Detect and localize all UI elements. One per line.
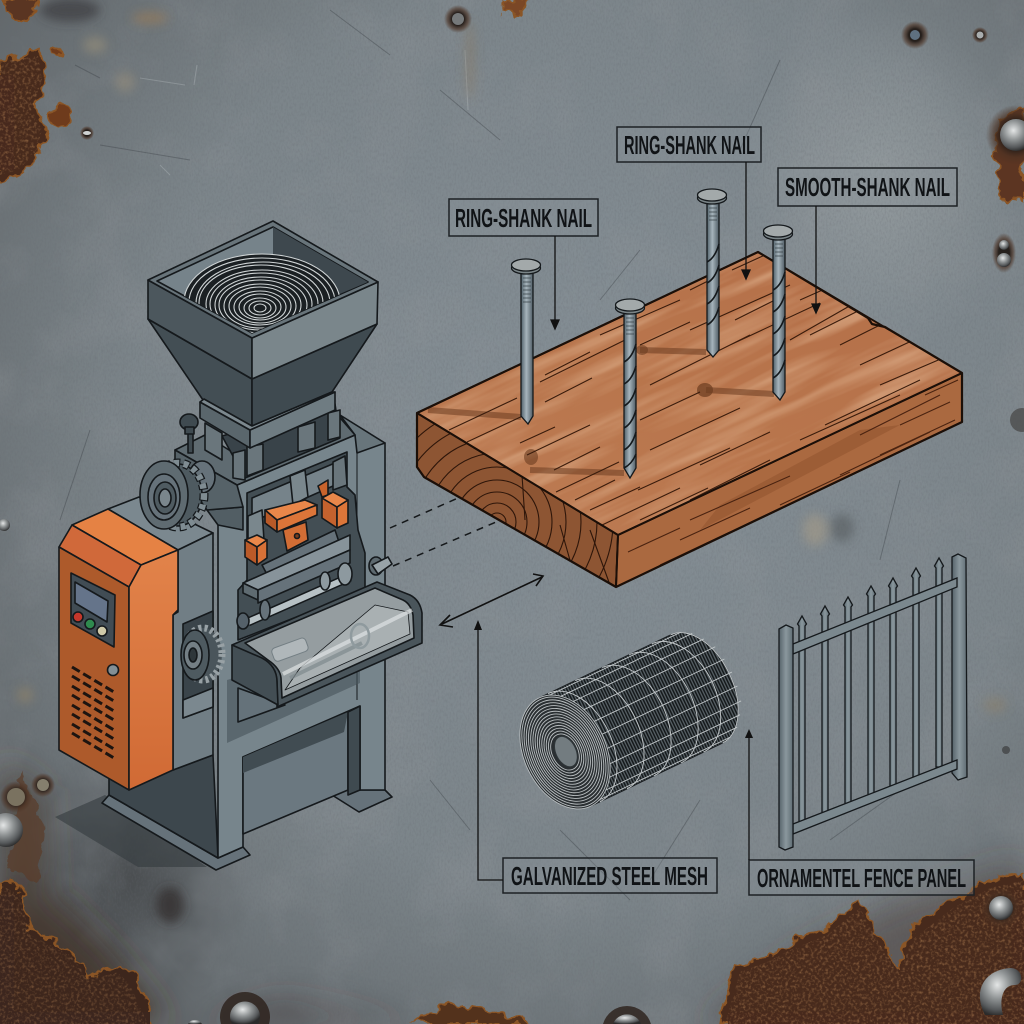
nail 2 spiral <box>616 299 644 478</box>
lower opening <box>243 706 360 834</box>
callout: ring-shank nail left: RING-SHANK NAIL <box>455 203 592 233</box>
callout: ring-shank nail left <box>449 199 598 329</box>
gear window <box>183 611 213 718</box>
callout: galvanized steel mesh: GALVANIZED STEEL MESH <box>511 861 708 891</box>
top block <box>175 412 355 485</box>
knob <box>180 414 198 453</box>
control cabinet top <box>108 497 213 550</box>
base foot left <box>102 795 250 870</box>
left pillar <box>207 507 243 530</box>
dark interior under collar <box>222 404 340 478</box>
right foot <box>332 788 392 812</box>
double arrow <box>440 574 543 627</box>
nail 4 spiral <box>764 225 792 400</box>
cabinet vents <box>72 667 114 758</box>
mechanism opening <box>238 452 365 640</box>
fence pickets <box>798 558 944 825</box>
blurred rust stains <box>0 760 1024 1024</box>
plank top face <box>416 251 961 536</box>
floor shadow <box>55 795 207 867</box>
orange control cabinet <box>59 509 178 790</box>
support posts <box>205 410 340 480</box>
plank outline <box>417 252 962 587</box>
left post <box>779 625 793 850</box>
hopper <box>148 221 378 426</box>
main front frame <box>218 435 385 858</box>
plank end grain face <box>418 415 617 585</box>
orange die blocks <box>245 480 348 565</box>
callout: ornamental fence panel <box>745 729 974 895</box>
plank side face <box>616 373 962 587</box>
fence rails <box>793 578 957 654</box>
reset knob <box>108 664 118 676</box>
nail 1 smooth <box>512 259 540 424</box>
ornamental fence panel <box>779 554 967 850</box>
right post <box>952 554 967 780</box>
feed roller assembly <box>237 557 392 629</box>
callout: smooth-shank nail <box>778 168 957 313</box>
side shadow face <box>109 755 218 858</box>
mesh end spiral <box>502 680 628 824</box>
callout: ring-shank nail top <box>617 127 761 279</box>
nails <box>512 189 792 478</box>
wood plank <box>416 250 964 588</box>
wire coil in hopper <box>184 254 340 333</box>
side panel of cabinet <box>173 533 213 770</box>
shadow under hatch <box>227 640 360 743</box>
mesh body <box>539 619 755 806</box>
callout: galvanized steel mesh <box>474 620 717 893</box>
hopper collar <box>200 392 335 448</box>
callout: ring-shank nail top: RING-SHANK NAIL <box>624 130 755 160</box>
machine: wire forming press <box>55 221 422 870</box>
wire mesh roll <box>502 618 758 824</box>
lower gear <box>181 628 222 680</box>
right pillar top <box>340 415 385 453</box>
dashed guide lines from machine to wood <box>390 498 496 566</box>
upper gear <box>140 461 215 529</box>
control panel <box>71 573 115 647</box>
transparent hatch cover <box>232 582 422 707</box>
nail 3 spiral <box>698 189 726 357</box>
